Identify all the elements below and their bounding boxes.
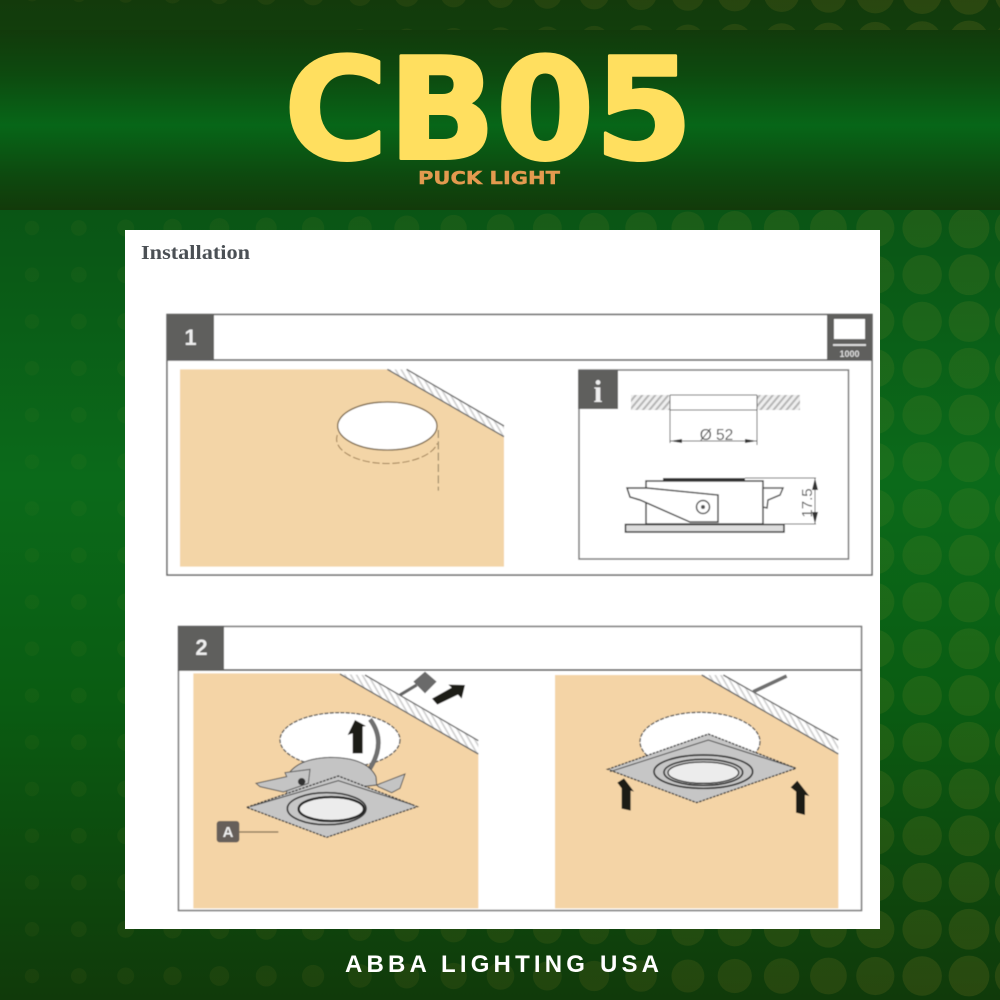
title: CB05 xyxy=(284,28,693,192)
footer brand: ABBA LIGHTING USA xyxy=(345,951,659,978)
step 2 header divider xyxy=(178,669,861,671)
step 2 number badge xyxy=(178,626,224,670)
right clip xyxy=(377,774,405,793)
panel: info box with dimensions xyxy=(578,370,848,559)
puck body xyxy=(287,757,377,795)
step 2 frame xyxy=(178,626,862,910)
hole diameter diagram xyxy=(631,395,800,445)
info badge xyxy=(578,370,618,409)
step 1 number badge: 1 xyxy=(184,325,197,350)
installation heading: Installation xyxy=(141,242,251,264)
white instruction card xyxy=(125,230,880,929)
subtitle: PUCK LIGHT xyxy=(418,168,561,189)
info badge: i xyxy=(594,373,603,409)
step 2 number badge: 2 xyxy=(195,635,208,660)
illustration: insert puck and feed wire: A xyxy=(223,824,234,841)
puck side view with height dimension xyxy=(626,478,818,532)
connector xyxy=(400,685,417,695)
left clip xyxy=(256,769,310,792)
puck side view with height dimension: 17.5 xyxy=(799,488,816,518)
callout A xyxy=(217,821,239,842)
illustration: press trim plate to ceiling xyxy=(555,675,838,908)
hole xyxy=(280,713,400,767)
illustration: ceiling with drilled hole xyxy=(180,369,504,567)
illustration: insert puck and feed wire xyxy=(193,672,478,908)
hole diameter diagram: Ø 52 xyxy=(700,427,733,444)
step 1 frame xyxy=(167,314,872,575)
up arrow xyxy=(348,720,366,753)
square trim plate xyxy=(608,734,796,803)
header band xyxy=(0,30,1000,210)
wire xyxy=(370,719,378,768)
panel: step 1 xyxy=(167,314,872,575)
step 1 header divider xyxy=(167,359,872,361)
up arrows xyxy=(617,778,634,811)
square trim plate xyxy=(247,776,417,837)
panel: step 2 xyxy=(178,626,862,910)
hole xyxy=(640,712,760,771)
icon: 1000 mm clearance xyxy=(827,314,872,360)
icon: 1000 mm clearance: 1000 xyxy=(839,349,860,359)
step 1 number badge xyxy=(167,314,214,360)
